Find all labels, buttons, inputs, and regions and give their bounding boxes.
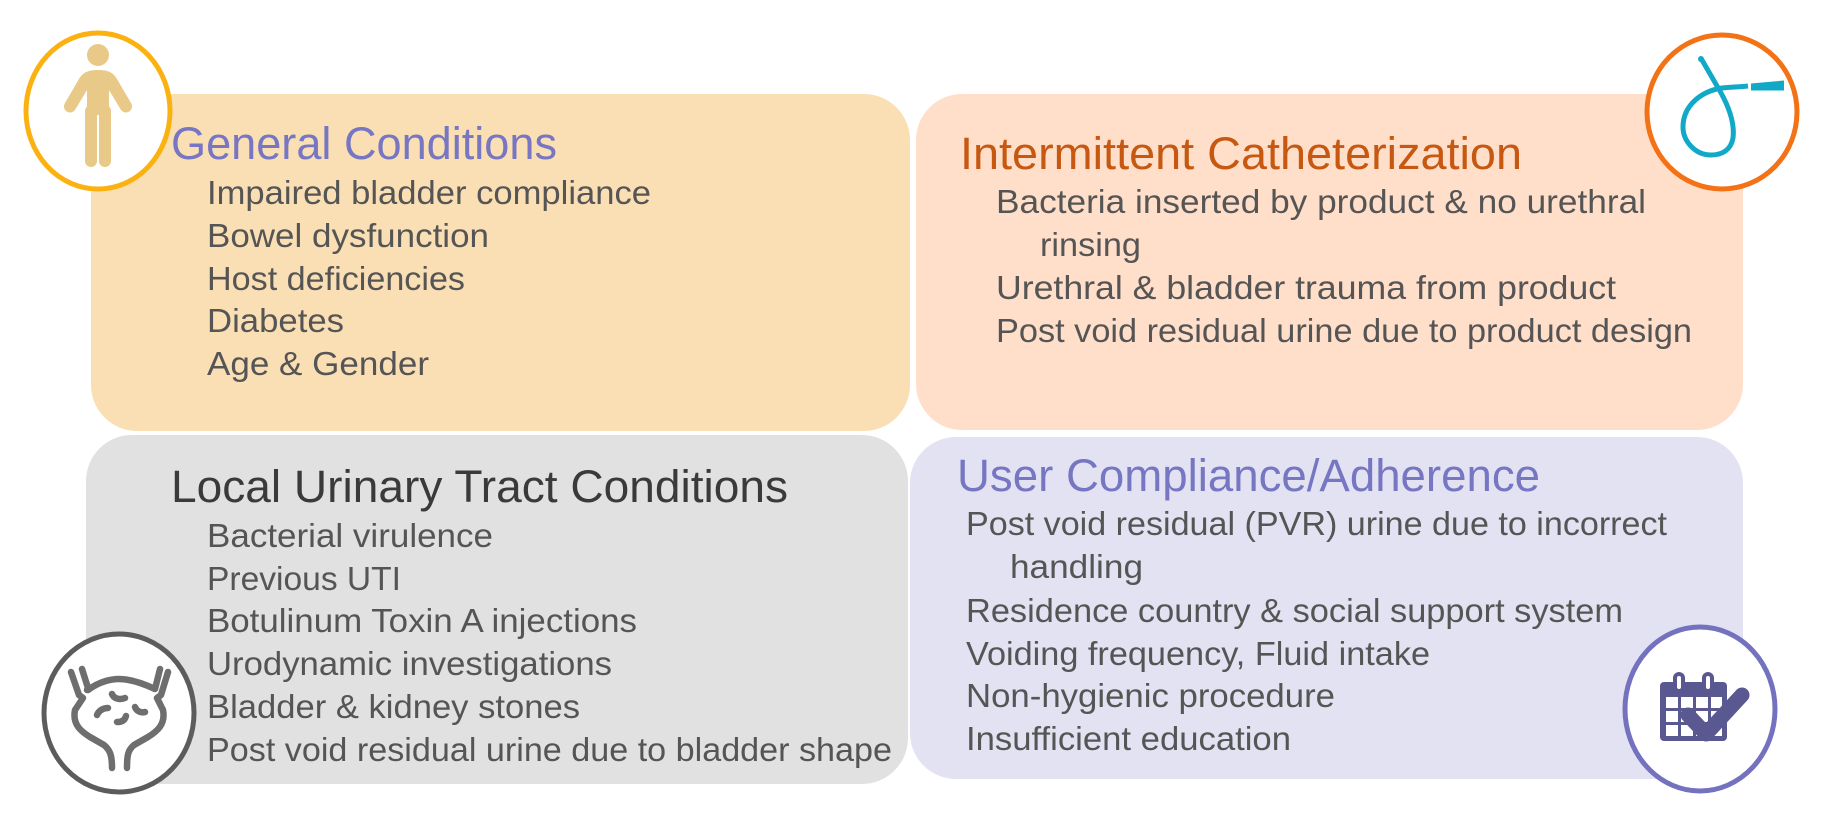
panel: general conditions [91, 94, 910, 431]
text block: local urinary tract conditions list: Post void residual urine due to bladder shape [207, 731, 892, 768]
text block: user compliance list [966, 505, 1667, 757]
text block: local urinary tract conditions list: Previous UTI [207, 560, 401, 597]
text block: intermittent catheterization list: Post void residual urine due to product design [996, 312, 1692, 349]
text block: user compliance list: Voiding frequency, Fluid intake [966, 635, 1430, 672]
text block: general conditions list [207, 174, 651, 382]
text block: general conditions list: Impaired bladder compliance [207, 174, 651, 211]
text block: local urinary tract conditions list: Bacterial virulence [207, 517, 493, 554]
heading: local urinary tract conditions: Local Urinary Tract Conditions [171, 461, 788, 512]
text block: user compliance list: Residence country & social support system [966, 592, 1623, 629]
icon: calendar with check mark in purple circle [1625, 627, 1775, 791]
text block: local urinary tract conditions list: Urodynamic investigations [207, 645, 612, 682]
icon: person in yellow circle [26, 33, 170, 189]
text block: intermittent catheterization list [996, 183, 1692, 349]
text block: intermittent catheterization list: rinsing [1040, 226, 1141, 263]
text block: general conditions list: Host deficiencies [207, 260, 465, 297]
icon: catheter in orange circle [1647, 35, 1797, 189]
heading: user compliance and adherence: User Compliance/Adherence [957, 450, 1540, 501]
icon: bladder in dark circle [44, 634, 194, 792]
heading: general conditions: General Conditions [171, 118, 557, 169]
text block: user compliance list: Non-hygienic procedure [966, 677, 1335, 714]
text block: intermittent catheterization list: Bacteria inserted by product & no urethral [996, 183, 1646, 220]
text block: local urinary tract conditions list: Bladder & kidney stones [207, 688, 580, 725]
text block: general conditions list: Bowel dysfunction [207, 217, 489, 254]
text block: general conditions list: Diabetes [207, 302, 344, 339]
panel: local urinary tract conditions [86, 435, 908, 784]
text block: user compliance list: Insufficient education [966, 720, 1291, 757]
text block: intermittent catheterization list: Urethral & bladder trauma from product [996, 269, 1616, 306]
text block: local urinary tract conditions list [207, 517, 892, 768]
text block: user compliance list: handling [1010, 548, 1143, 585]
text block: local urinary tract conditions list: Botulinum Toxin A injections [207, 602, 637, 639]
text block: general conditions list: Age & Gender [207, 345, 429, 382]
panel: user compliance and adherence [910, 437, 1743, 779]
text block: user compliance list: Post void residual (PVR) urine due to incorrect [966, 505, 1667, 542]
heading: intermittent catheterization: Intermittent Catheterization [960, 128, 1522, 179]
panel: intermittent catheterization [916, 94, 1743, 430]
